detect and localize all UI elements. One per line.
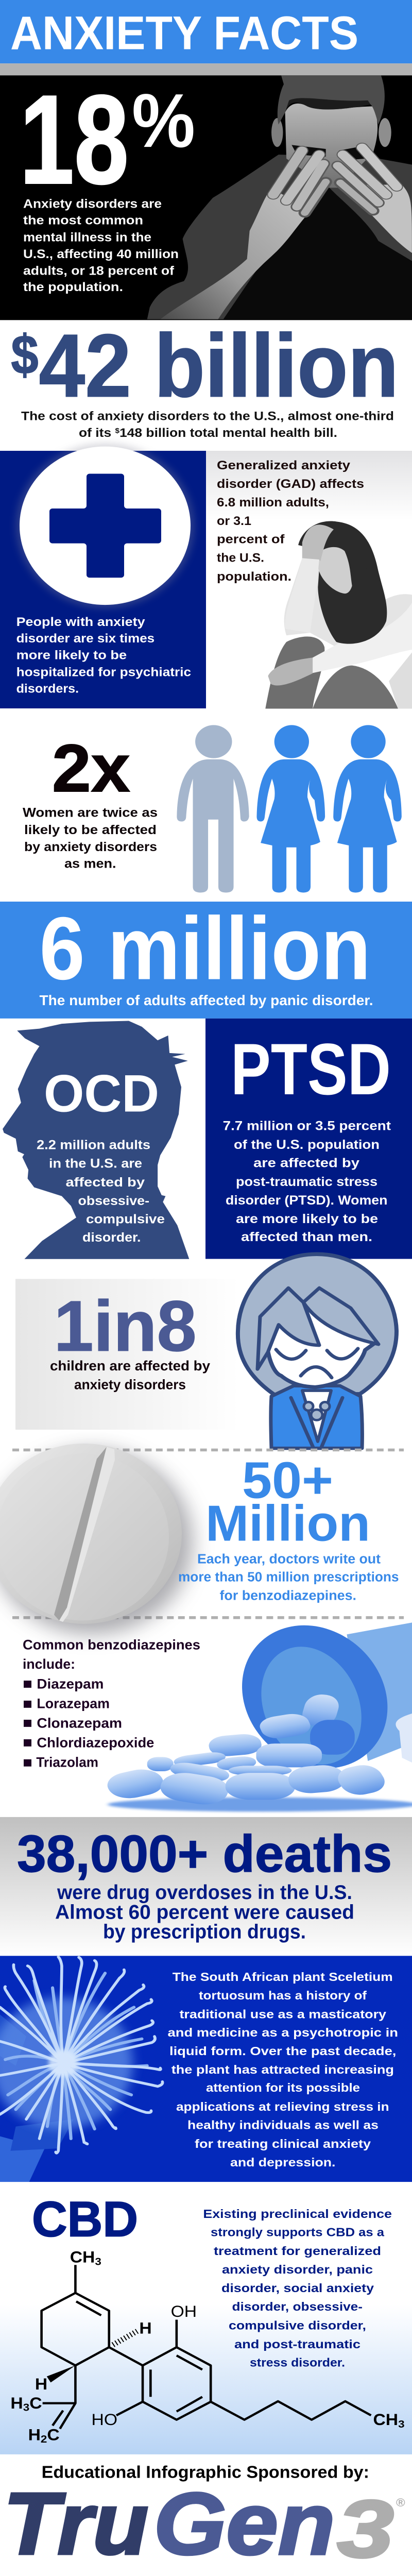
text block: PTSD statistics: of the U.S. population xyxy=(234,1137,380,1152)
chemical structure: cannabidiol molecule: H xyxy=(28,2426,41,2444)
text block: most common mental illness: the population. xyxy=(23,280,123,294)
text block: OCD statistics xyxy=(37,1137,165,1245)
text block: OCD statistics: affected by xyxy=(66,1175,145,1190)
text block: PTSD statistics: are more likely to be xyxy=(236,1211,378,1226)
caption: cost: of its xyxy=(79,426,111,440)
title banner xyxy=(0,0,412,75)
big number 18: 18 xyxy=(20,70,129,210)
text block: GAD statistics xyxy=(217,459,364,584)
chemical structure: cannabidiol molecule: 3 xyxy=(23,2401,29,2414)
text block: PTSD statistics: 7.7 million or 3.5 percent xyxy=(223,1118,391,1133)
text block: Sceletium tortuosum: the plant has attracted increasing xyxy=(171,2063,394,2077)
text block: GAD statistics: disorder (GAD) affects xyxy=(217,477,364,491)
chemical structure: cannabidiol molecule: 2 xyxy=(41,2433,47,2445)
logo: TruGen3: Tru xyxy=(4,2474,148,2573)
caption: overdoses xyxy=(55,1880,354,1943)
footer: sponsor xyxy=(4,2463,405,2574)
panel: women twice as likely xyxy=(23,725,402,892)
big word Million: Million xyxy=(205,1495,370,1552)
text block: six times more likely: disorder are six times xyxy=(16,632,154,646)
logo: TruGen3 xyxy=(4,2474,405,2574)
text block: OCD statistics: obsessive- xyxy=(78,1193,149,1208)
chemical structure: cannabidiol molecule: C xyxy=(47,2426,60,2444)
chemical structure: cannabidiol molecule: H xyxy=(35,2375,47,2393)
list: drug names: Clonazepam xyxy=(37,1716,122,1731)
caption: overdoses: Almost 60 percent were caused xyxy=(55,1901,354,1923)
caption: cost: The cost of anxiety disorders to the U.S., almost one-third xyxy=(21,410,394,423)
photo: spilled pill bottle xyxy=(101,1620,412,1811)
icon: head silhouette xyxy=(3,1021,189,1259)
text block: PTSD statistics: disorder (PTSD). Women xyxy=(226,1193,388,1208)
caption: children affected: anxiety disorders xyxy=(74,1377,186,1392)
chemical structure: cannabidiol molecule xyxy=(10,2248,405,2445)
text block: Sceletium tortuosum: and medicine as a psychotropic in xyxy=(168,2026,398,2040)
text block: six times more likely xyxy=(16,615,191,696)
panel: CBD xyxy=(0,2182,412,2454)
dollar sign: $ xyxy=(11,325,39,385)
chemical structure: cannabidiol molecule: 3 xyxy=(398,2418,405,2430)
text block: GAD statistics: 6.8 million adults, xyxy=(217,496,329,510)
text block: CBD evidence: compulsive disorder, xyxy=(229,2319,366,2332)
panel: 1 in 8 children xyxy=(15,1254,397,1448)
logo: TruGen3: Gen xyxy=(154,2475,335,2573)
text block: OCD statistics: disorder. xyxy=(82,1230,141,1245)
icon: man figure xyxy=(177,725,249,892)
caption: cost: 148 billion total mental health bill. xyxy=(119,426,337,440)
heading: OCD: OCD xyxy=(44,1064,159,1123)
text block: PTSD statistics xyxy=(223,1118,391,1244)
chemical structure: cannabidiol molecule: CH xyxy=(70,2248,95,2266)
caption: overdoses: by prescription drugs. xyxy=(103,1920,306,1943)
list: drug names: Lorazepam xyxy=(37,1696,110,1711)
chemical structure: cannabidiol molecule: C xyxy=(29,2394,42,2412)
text block: Sceletium tortuosum: and depression. xyxy=(230,2156,336,2170)
chemical structure: cannabidiol molecule: OH xyxy=(171,2302,197,2320)
caption: prescriptions: for benzodiazepines. xyxy=(220,1588,356,1603)
text block: CBD evidence: stress disorder. xyxy=(250,2356,345,2369)
caption: prescriptions: Each year, doctors write out xyxy=(197,1551,381,1566)
text block: common benzodiazepines: Common benzodiazepines xyxy=(23,1637,200,1652)
text block: CBD evidence: treatment for generalized xyxy=(214,2245,381,2258)
caption: prescriptions xyxy=(178,1551,399,1603)
panel: 50 million prescriptions xyxy=(0,1444,404,1634)
illustration: sad child in school uniform xyxy=(238,1254,397,1448)
text block: most common mental illness: adults, or 18 percent of xyxy=(23,264,175,278)
text block: CBD evidence: disorder, social anxiety xyxy=(221,2282,374,2295)
panel: 6 million panic disorder xyxy=(0,899,412,1019)
chemical structure: cannabidiol molecule: HO xyxy=(92,2411,117,2429)
text block: six times more likely: hospitalized for psychiatric xyxy=(16,665,191,679)
logo: TruGen3: ® xyxy=(396,2496,405,2509)
icon: medical cross in circle xyxy=(16,444,194,608)
text block: common benzodiazepines xyxy=(23,1637,200,1770)
panel: 42 billion cost xyxy=(11,316,399,440)
big number 1 in 8: 1in8 xyxy=(54,1286,197,1366)
text block: most common mental illness: Anxiety disorders are xyxy=(23,197,162,211)
text block: PTSD statistics: are affected by xyxy=(253,1156,360,1171)
text block: Sceletium tortuosum: attention for its possible xyxy=(206,2081,360,2095)
panel: PTSD xyxy=(205,1019,412,1259)
text block: OCD statistics: compulsive xyxy=(86,1211,165,1226)
panel: 18 percent xyxy=(0,70,412,320)
caption: panic disorder: The number of adults affected by panic disorder. xyxy=(40,993,373,1009)
text block: Sceletium tortuosum: liquid form. Over the past decade, xyxy=(169,2045,396,2058)
sponsor line: Educational Infographic Sponsored by: xyxy=(42,2463,369,2482)
panel: OCD xyxy=(3,1021,189,1259)
text block: PTSD statistics: affected than men. xyxy=(241,1229,372,1244)
caption: overdoses: were drug overdoses in the U.S. xyxy=(57,1880,352,1903)
chemical structure: cannabidiol molecule: H xyxy=(139,2319,152,2337)
caption: children affected: children are affected by xyxy=(50,1358,210,1374)
text block: Sceletium tortuosum: for treating clinical anxiety xyxy=(195,2138,371,2151)
chemical structure: cannabidiol molecule: 3 xyxy=(95,2255,101,2267)
text block: GAD statistics: percent of xyxy=(217,532,285,546)
text block: CBD evidence: Existing preclinical evidence xyxy=(203,2208,392,2221)
text block: PTSD statistics: post-traumatic stress xyxy=(236,1174,377,1189)
text block: six times more likely: disorders. xyxy=(16,682,79,696)
heading: CBD: CBD xyxy=(32,2192,138,2247)
photo: woman holding her head xyxy=(265,521,412,708)
text block: Sceletium tortuosum: The South African plant Sceletium xyxy=(173,1971,393,1984)
big number 50+: 50+ xyxy=(242,1452,333,1510)
text block: CBD evidence: disorder, obsessive- xyxy=(232,2300,363,2314)
text block: twice as likely xyxy=(23,805,158,871)
panel: Sceletium tortuosum xyxy=(0,1956,412,2182)
text block: six times more likely: People with anxiety xyxy=(16,615,145,629)
pictogram: one man and two women xyxy=(177,725,402,892)
text block: GAD statistics: population. xyxy=(217,570,291,584)
big number 38,000+ deaths: 38,000+ deaths xyxy=(17,1825,392,1883)
caption: children affected xyxy=(50,1358,210,1392)
list: drug names: Triazolam xyxy=(36,1755,98,1770)
text block: most common mental illness: U.S., affecting 40 million xyxy=(23,247,179,261)
text block: Sceletium tortuosum: traditional use as a masticatory xyxy=(180,2008,387,2021)
icon: second woman figure xyxy=(333,725,402,892)
text block: most common mental illness: mental illness in the xyxy=(23,230,151,244)
text block: OCD statistics: 2.2 million adults xyxy=(37,1137,150,1152)
list: drug names: Chlordiazepoxide xyxy=(37,1735,154,1750)
caption: cost: $ xyxy=(115,427,119,435)
text block: OCD statistics: in the U.S. are xyxy=(49,1156,142,1171)
illustration: white tablet xyxy=(0,1444,193,1634)
list: drug names: Diazepam xyxy=(37,1676,104,1691)
text block: Sceletium tortuosum xyxy=(168,1971,398,2170)
text block: GAD statistics: Generalized anxiety xyxy=(217,459,350,472)
text block: CBD evidence xyxy=(203,2208,392,2369)
panel: hospitalization xyxy=(0,444,206,708)
logo: TruGen3: 3 xyxy=(337,2484,394,2574)
text block: most common mental illness xyxy=(23,197,179,294)
text block: CBD evidence: and post-traumatic xyxy=(234,2338,360,2351)
text block: GAD statistics: the U.S. xyxy=(217,551,264,565)
text block: most common mental illness: the most common xyxy=(23,214,143,227)
text block: twice as likely: likely to be affected xyxy=(24,822,157,837)
text block: twice as likely: as men. xyxy=(64,856,116,871)
panel: common benzodiazepines xyxy=(23,1620,412,1811)
text block: CBD evidence: anxiety disorder, panic xyxy=(222,2263,373,2277)
text block: twice as likely: by anxiety disorders xyxy=(24,839,157,854)
chemical structure: cannabidiol molecule: H xyxy=(10,2394,23,2412)
text block: twice as likely: Women are twice as xyxy=(23,805,158,820)
text block: Sceletium tortuosum: tortuosum has a history of xyxy=(199,1989,367,2003)
text block: CBD evidence: strongly supports CBD as a xyxy=(211,2226,385,2240)
text block: six times more likely: more likely to be xyxy=(16,648,127,662)
photo: man covering his eyes xyxy=(147,75,412,319)
text block: common benzodiazepines: include: xyxy=(23,1656,75,1672)
photo: flower xyxy=(0,1957,163,2182)
list: drug names xyxy=(24,1676,154,1770)
percent sign: % xyxy=(132,78,195,163)
chemical structure: cannabidiol molecule: CH xyxy=(373,2411,398,2429)
panel: generalized anxiety disorder xyxy=(206,451,412,708)
text block: GAD statistics: or 3.1 xyxy=(217,514,251,528)
text block: Sceletium tortuosum: healthy individuals as well as xyxy=(187,2119,379,2132)
big number 2x: 2x xyxy=(52,731,130,806)
text block: Sceletium tortuosum: applications at relieving stress in xyxy=(176,2100,389,2114)
icon: woman figure xyxy=(256,725,325,892)
caption: cost xyxy=(21,410,394,440)
title: ANXIETY FACTS xyxy=(10,7,358,60)
panel: 38,000 deaths xyxy=(0,1817,412,1956)
caption: prescriptions: more than 50 million prescriptions xyxy=(178,1569,399,1584)
